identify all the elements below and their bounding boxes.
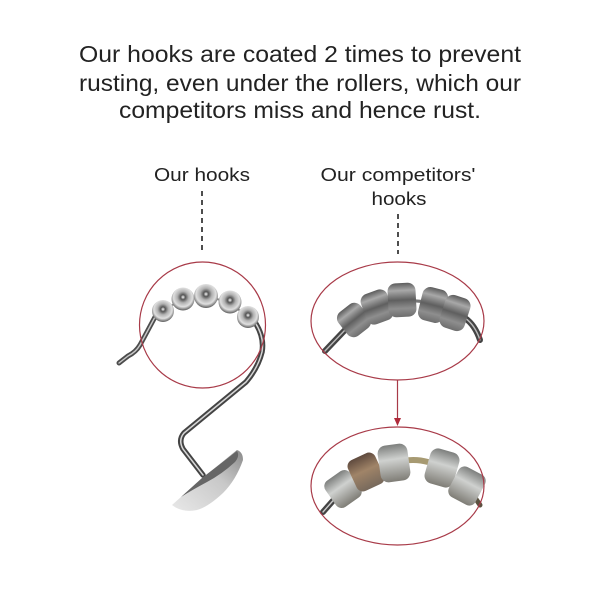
red ellipse: competitors new [311,262,484,380]
bead wire [163,297,248,317]
hook: our coated hook [119,297,263,511]
hook wire: left end [119,317,155,363]
hook base dome [172,450,243,511]
title: competitors miss and hence rust. [119,97,481,123]
title: rusting, even under the rollers, which our [79,70,521,96]
dome top face [181,451,238,497]
label: our hooks: Our hooks [154,164,250,185]
competitor rollers: new [325,282,480,351]
competitor wire [325,301,480,351]
chrome beads [152,284,259,328]
red circle: our hook [140,262,266,388]
hook wire: shank [181,318,263,475]
label: competitors' hooks: Our competitors' [320,164,476,185]
label: competitors' hooks [320,164,476,209]
dashed leader: competitors' hooks [397,214,399,254]
arrow: new to rusted [394,380,401,426]
red ellipse: competitors rusted [311,427,484,545]
title: Our hooks are coated 2 times to prevent [79,41,521,67]
rusted wire [323,460,480,512]
competitor rollers: rusted [322,443,488,512]
label: competitors' hooks: hooks [372,188,426,209]
title [79,41,521,123]
dashed leader: our hooks [201,191,203,253]
